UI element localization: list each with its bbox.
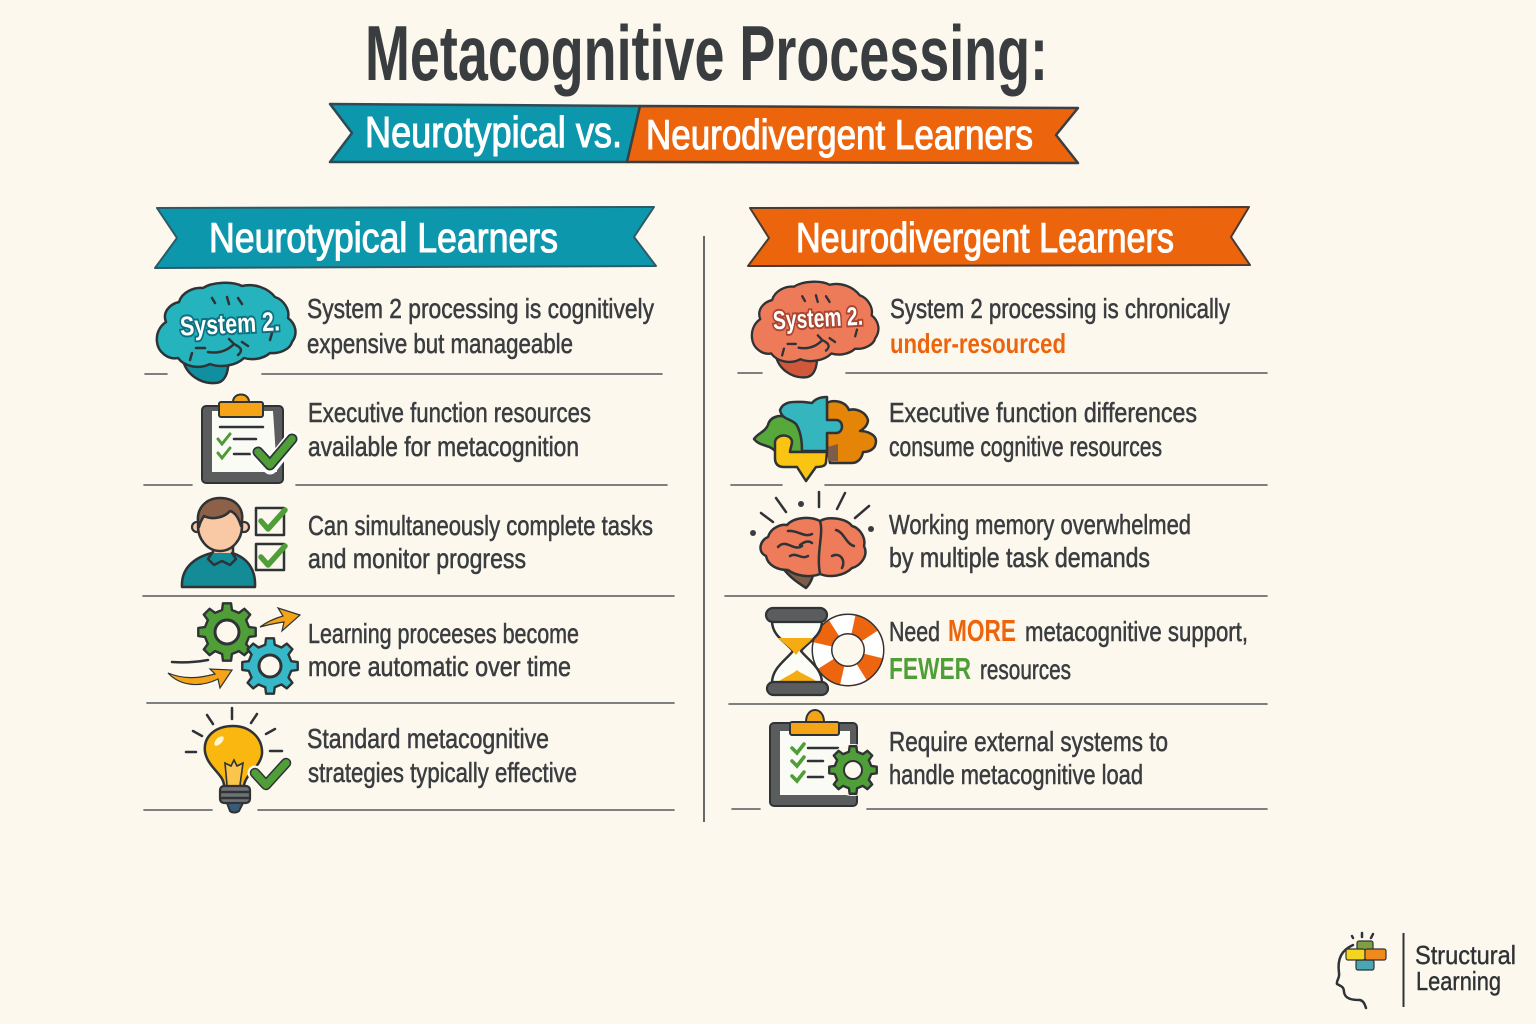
row 1: system 2 manageable (157, 283, 654, 383)
center divider (703, 236, 705, 822)
icon: clipboard with gear (770, 710, 879, 806)
heading: neurodivergent ribbon: Neurodivergent Learners (796, 214, 1174, 261)
panel: neurotypical learners (143, 207, 674, 812)
text: and monitor progress (308, 543, 526, 574)
row 5: external systems (770, 710, 1168, 806)
row 2: executive differences (754, 397, 1197, 481)
text: under-resourced (890, 328, 1066, 359)
text: Executive function differences (889, 397, 1197, 428)
icon: teal brain: System 2. (179, 306, 281, 342)
text: Executive function resources (308, 397, 591, 428)
text (308, 618, 579, 682)
text: Working memory overwhelmed (889, 509, 1191, 540)
panel: neurodivergent learners (725, 207, 1267, 809)
subtitle banner: Neurodivergent Learners (646, 111, 1033, 158)
row 5: standard strategies (186, 708, 577, 812)
text (889, 613, 1248, 686)
text: strategies typically effective (308, 757, 577, 788)
subtitle banner (330, 104, 1078, 163)
heading: neurotypical ribbon: Neurotypical Learners (209, 214, 558, 261)
text (307, 723, 577, 788)
text (889, 509, 1191, 573)
icon: coral brain (752, 282, 878, 377)
text: Learning proceeses become (308, 618, 579, 649)
text: more automatic over time (308, 651, 571, 682)
row 3: simultaneous tasks (182, 498, 653, 587)
row 1: under-resourced (752, 282, 1230, 377)
text (307, 293, 654, 359)
text (889, 726, 1168, 790)
text: FEWER (889, 651, 971, 686)
text: Standard metacognitive (307, 723, 549, 754)
text: Can simultaneously complete tasks (308, 510, 653, 541)
text: Need (889, 616, 940, 647)
icon: hourglass and life ring (766, 608, 874, 695)
text: available for metacognition (308, 431, 579, 462)
icon: puzzle pieces (754, 397, 876, 481)
logo: structural learning (1337, 933, 1516, 1008)
icon: gears and arrows (168, 603, 300, 694)
text: by multiple task demands (889, 542, 1150, 573)
icon: coral brain: System 2. (772, 301, 864, 335)
text (890, 293, 1230, 359)
row 4: more support, fewer resources (766, 608, 1248, 695)
text: metacognitive support, (1025, 616, 1248, 647)
icon: person with checkboxes (182, 498, 285, 587)
text: System 2 processing is chronically (890, 293, 1230, 324)
row 2: executive function available (202, 394, 591, 483)
text: Require external systems to (889, 726, 1168, 757)
text: System 2 processing is cognitively (307, 293, 654, 324)
text (308, 397, 591, 462)
logo divider (1402, 933, 1404, 1007)
logo text: Learning (1416, 966, 1501, 996)
icon: light bulb with check (186, 708, 286, 812)
heading: neurotypical ribbon (155, 207, 656, 268)
icon: overwhelmed brain (750, 492, 874, 588)
text: resources (980, 654, 1071, 685)
text: handle metacognitive load (889, 759, 1143, 790)
logo text (1415, 940, 1516, 996)
row 3: working memory (750, 492, 1191, 588)
title: Metacognitive Processing: (365, 9, 1048, 97)
text (308, 510, 653, 574)
row 4: automatic over time (168, 603, 579, 694)
text: MORE (948, 613, 1016, 648)
subtitle banner: Neurotypical vs. (365, 108, 622, 157)
text: consume cognitive resources (889, 431, 1162, 462)
logo text: Structural (1415, 940, 1516, 970)
text (889, 397, 1197, 462)
icon: clipboard with check (202, 394, 293, 483)
text: expensive but manageable (307, 328, 573, 359)
icon: teal brain (157, 283, 295, 383)
icon: head with blocks (1337, 933, 1386, 1008)
